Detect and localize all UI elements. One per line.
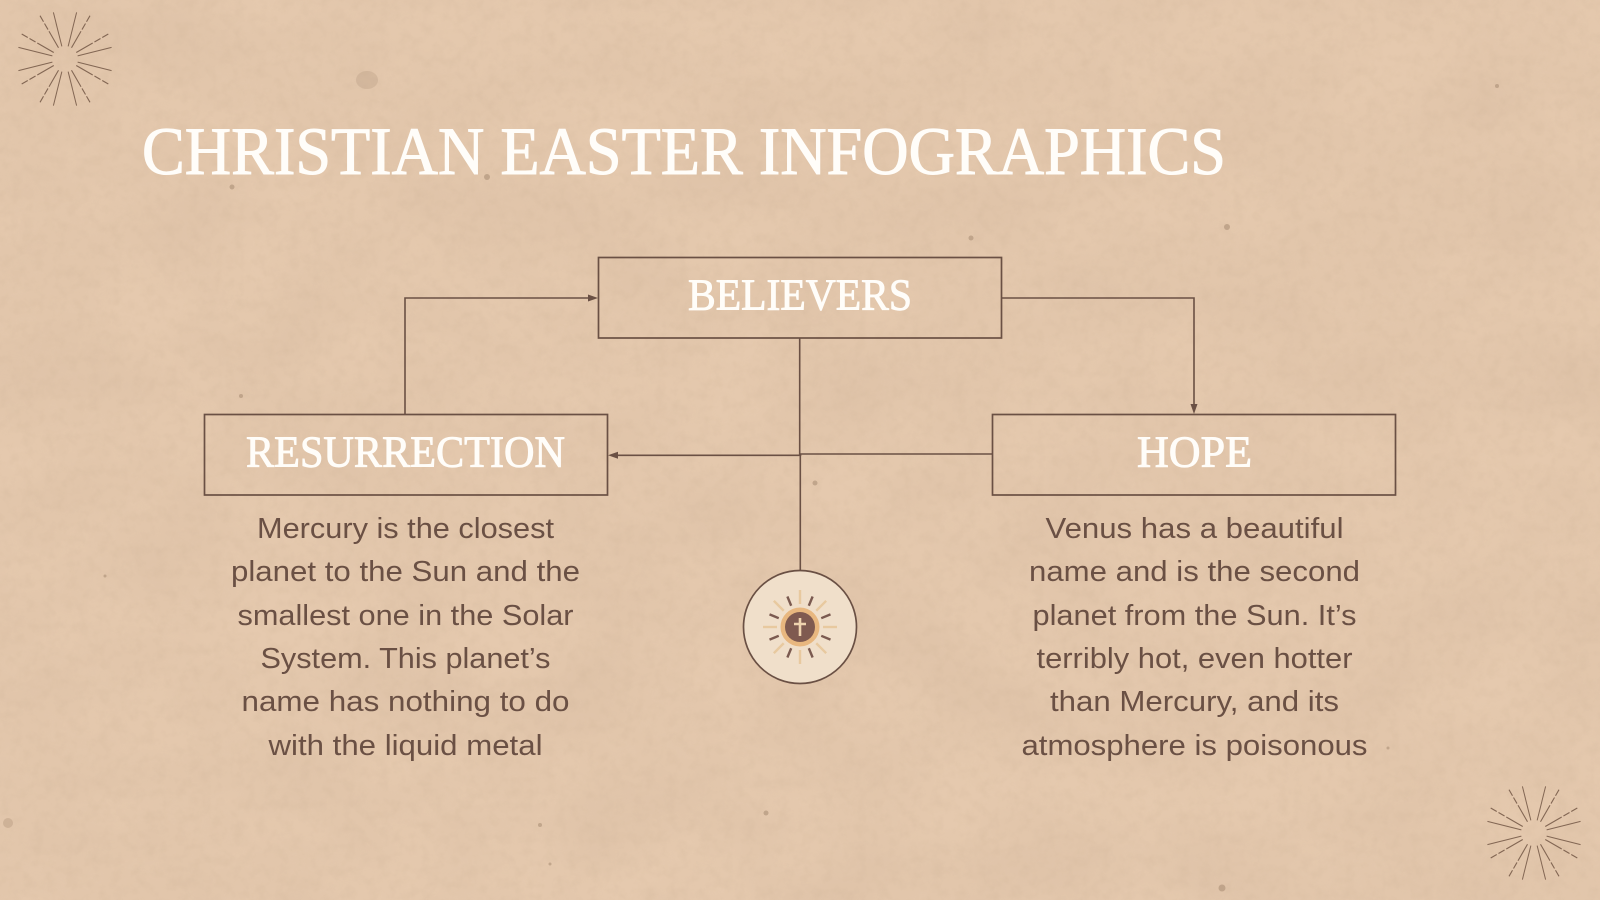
text block: mercury description: with the liquid metal xyxy=(267,730,542,762)
panel: hope xyxy=(992,414,1396,495)
heading: resurrection: RESURRECTION xyxy=(246,428,565,477)
heading: hope: HOPE xyxy=(1137,428,1252,477)
icon: sunburst bottom right xyxy=(1487,786,1581,880)
arrow: hope to resurrection xyxy=(608,452,992,459)
panel: believers xyxy=(598,258,1002,338)
text block: mercury description: Mercury is the closest xyxy=(257,513,554,545)
icon: sunburst top left xyxy=(18,12,112,106)
arrow: resurrection to believers xyxy=(405,294,598,414)
connector: believers to sun icon xyxy=(799,338,801,572)
text block: venus description: Venus has a beautiful xyxy=(1046,513,1344,545)
title: CHRISTIAN EASTER INFOGRAPHICS xyxy=(142,113,1226,189)
arrow: believers to hope xyxy=(1002,298,1198,414)
text block: mercury description: smallest one in the Solar xyxy=(238,600,574,632)
text block: venus description: atmosphere is poisonous xyxy=(1022,730,1368,762)
text block: mercury description: planet to the Sun and the xyxy=(231,556,580,588)
text block: venus description: terribly hot, even hotter xyxy=(1036,643,1353,675)
text block: mercury description: System. This planet’s xyxy=(260,643,550,675)
text block: venus description: name and is the second xyxy=(1029,556,1360,588)
heading: believers: BELIEVERS xyxy=(688,270,912,319)
panel: resurrection xyxy=(204,414,608,495)
text block: mercury description xyxy=(231,513,580,762)
text block: venus description: than Mercury, and its xyxy=(1050,686,1339,718)
text block: mercury description: name has nothing to do xyxy=(242,686,570,718)
icon: sun with cross xyxy=(744,570,856,684)
text block: venus description xyxy=(1022,513,1368,762)
text block: venus description: planet from the Sun. It’s xyxy=(1032,600,1356,632)
